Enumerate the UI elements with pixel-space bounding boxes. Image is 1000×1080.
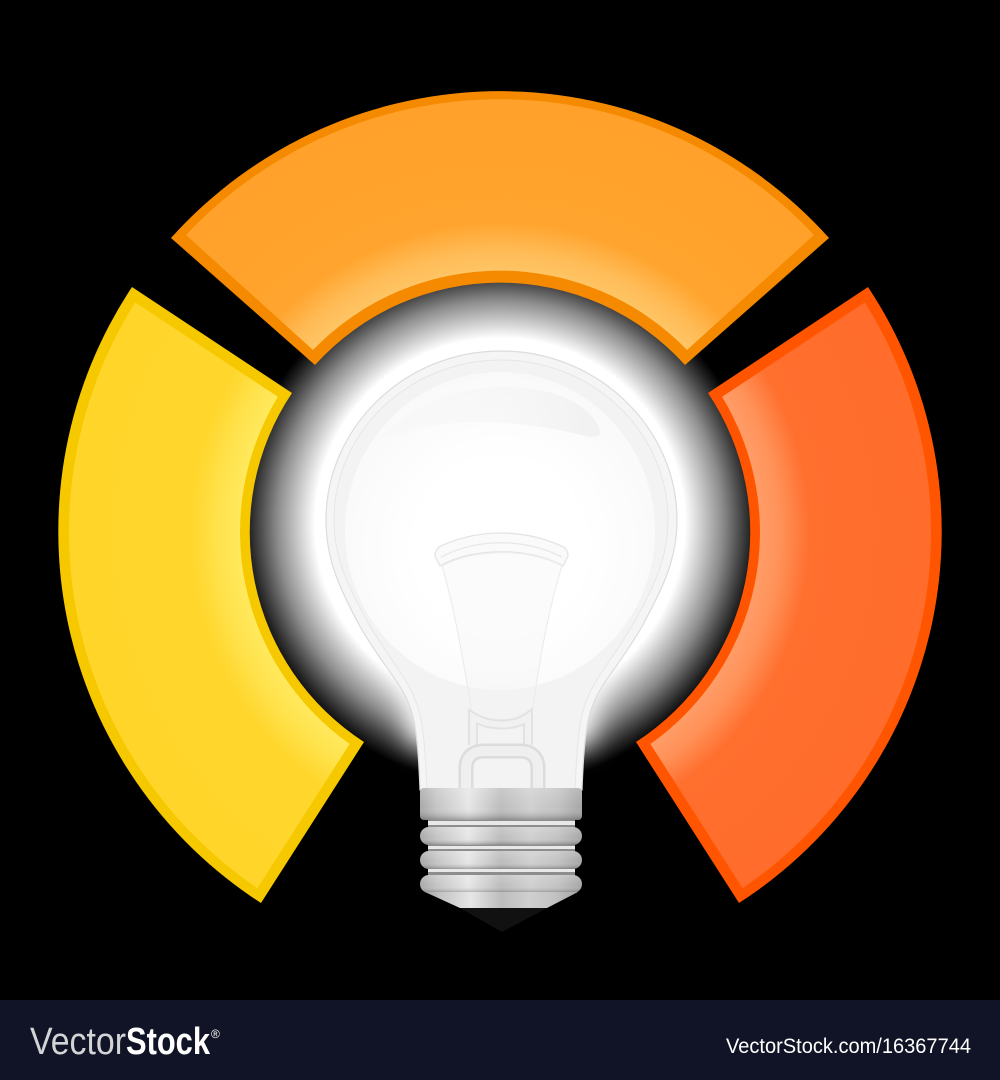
filament stem — [442, 552, 562, 720]
bulb glass — [326, 351, 677, 790]
glass inner rim — [334, 360, 668, 790]
inner bright sphere — [345, 372, 655, 690]
logo mark: registered: ® — [211, 1027, 220, 1041]
panel: top orange segment — [171, 91, 829, 365]
panel: left yellow segment — [58, 287, 364, 903]
wire loop — [466, 751, 538, 788]
panel: right orange-red segment — [636, 287, 942, 903]
bulb screw base — [420, 788, 582, 932]
filament bracket — [473, 717, 528, 745]
logo: VectorStock: Stock — [126, 1021, 211, 1063]
footer bar — [0, 1000, 1000, 1080]
light glow — [238, 261, 762, 785]
logo: VectorStock — [30, 1021, 211, 1063]
logo: VectorStock: Vector — [30, 1021, 126, 1063]
glass highlight — [376, 387, 600, 443]
footer image id: VectorStock.com/16367744 — [726, 1035, 971, 1058]
filament bridge — [435, 533, 568, 566]
icon: light bulb — [326, 351, 677, 932]
